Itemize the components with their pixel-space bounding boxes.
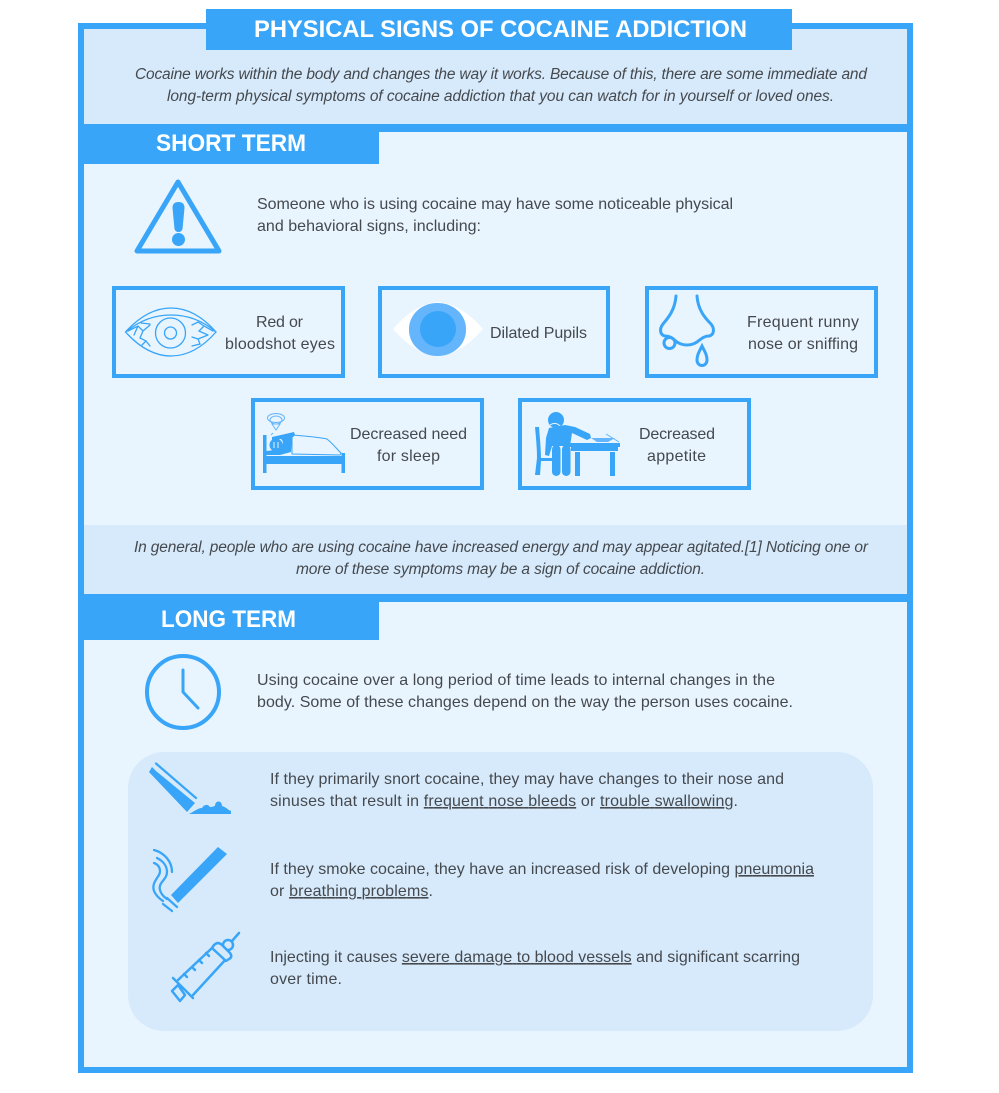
- label: appetite: [647, 448, 706, 465]
- text: injecting: [270, 949, 800, 988]
- text: snorting: sinuses that result in frequent nose bleeds or trouble swallowing.: [270, 793, 738, 810]
- panel: intro: [84, 29, 907, 124]
- card: decreased sleep: [253, 400, 482, 488]
- label: Decreased: [639, 426, 715, 443]
- label: Dilated Pupils: [490, 325, 587, 342]
- text: smoking: [270, 861, 814, 900]
- title: [206, 9, 792, 50]
- card: runny nose: [647, 288, 876, 376]
- text: smoking: If they smoke cocaine, they have an increased risk of developing pneumonia: [270, 861, 814, 878]
- heading: short term: [84, 124, 907, 164]
- heading: long term: LONG TERM: [161, 606, 296, 633]
- label: [747, 314, 859, 353]
- card: red eyes: [114, 288, 343, 376]
- label: bloodshot eyes: [225, 336, 335, 353]
- label: [639, 426, 715, 465]
- icon: snorting straw: [149, 764, 231, 814]
- text: injecting: over time.: [270, 971, 342, 988]
- icon: clock: [147, 656, 219, 728]
- heading: long term: [84, 594, 907, 640]
- short term intro text: [257, 196, 733, 235]
- icon: nose: [661, 296, 713, 366]
- label: Decreased need: [350, 426, 467, 443]
- icon: cigarette: [153, 847, 227, 911]
- note text: In general, people who are using cocaine have increased energy and may appear agitated.[1] Noticing one or: [134, 539, 869, 556]
- text: snorting: [270, 771, 784, 810]
- icon: bloodshot eye: [126, 308, 216, 356]
- icon: person awake in bed: [263, 414, 345, 473]
- card: decreased appetite: [520, 400, 749, 488]
- text: smoking: or breathing problems.: [270, 883, 433, 900]
- heading: short term: SHORT TERM: [156, 130, 306, 157]
- long term intro text: [257, 672, 793, 711]
- long term intro text: Using cocaine over a long period of time leads to internal changes in the: [257, 672, 775, 689]
- card: dilated pupils: [380, 288, 608, 376]
- icon: dilated eye: [393, 302, 483, 356]
- outer frame panel: [81, 26, 910, 1070]
- text: injecting: Injecting it causes severe damage to blood vessels and significant scarring: [270, 949, 800, 966]
- label: nose or sniffing: [748, 336, 858, 353]
- label: Red or: [256, 314, 304, 331]
- title: PHYSICAL SIGNS OF COCAINE ADDICTION: [254, 16, 747, 43]
- intro text: long-term physical symptoms of cocaine addiction that you can watch for in yourself or loved ones.: [167, 88, 834, 105]
- intro text: [135, 66, 868, 105]
- icon: warning triangle: [137, 182, 219, 251]
- short term intro text: Someone who is using cocaine may have some noticeable physical: [257, 196, 733, 213]
- text: snorting: If they primarily snort cocaine, they may have changes to their nose and: [270, 771, 784, 788]
- long term intro text: body. Some of these changes depend on the way the person uses cocaine.: [257, 694, 793, 711]
- label: Frequent runny: [747, 314, 859, 331]
- icon: syringe: [172, 933, 239, 1001]
- note text: [134, 539, 869, 578]
- panel: methods of use: [128, 752, 873, 1031]
- panel: general note: [84, 525, 907, 594]
- label: [350, 426, 467, 465]
- note text: more of these symptoms may be a sign of cocaine addiction.: [296, 561, 705, 578]
- label: [225, 314, 335, 353]
- intro text: Cocaine works within the body and changes the way it works. Because of this, there are some immediate and: [135, 66, 868, 83]
- icon: person at table: [535, 412, 620, 476]
- short term intro text: and behavioral signs, including:: [257, 218, 481, 235]
- label: for sleep: [377, 448, 440, 465]
